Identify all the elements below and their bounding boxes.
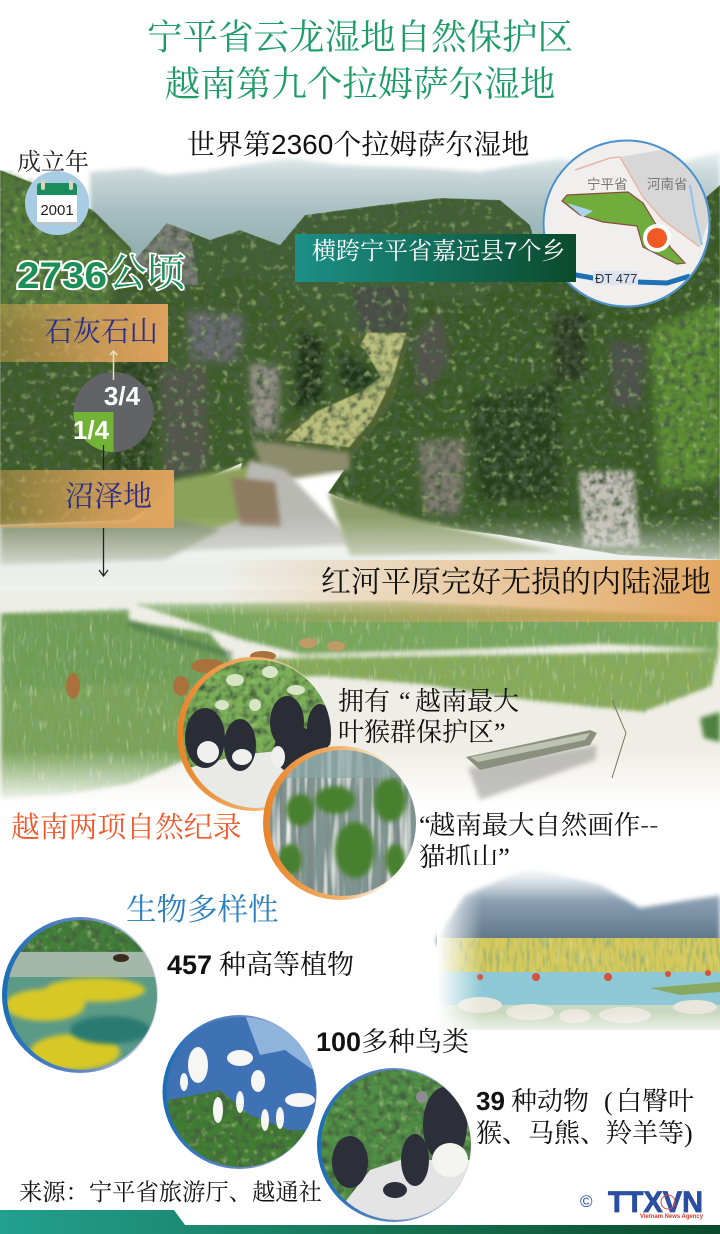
banner: spans 7 communes	[295, 231, 576, 282]
map: reserve location	[540, 140, 715, 310]
text: largest langur reserve: “	[399, 687, 411, 716]
icon: calendar 2001	[25, 171, 89, 235]
arrow: down from marshland	[99, 445, 108, 576]
pie chart: 3/4 limestone, 1/4 marsh: 3/4	[104, 381, 141, 411]
title: 越南第九个拉姆萨尔湿地	[165, 56, 555, 107]
map: reserve location: 河南省	[647, 177, 688, 192]
heading: biodiversity: 生物多样性	[126, 885, 278, 929]
cattle	[66, 651, 276, 699]
logo: TTXVN: TTXVN	[608, 1186, 703, 1219]
stat: 39 animal species: 白臀叶	[616, 1081, 694, 1118]
label: limestone mountains: 石灰石山	[44, 309, 158, 350]
photo circle: higher plants	[2, 917, 160, 1073]
logo: TTXVN: Vietnam News Agency	[640, 1214, 704, 1220]
map: reserve location: 宁平省	[587, 176, 628, 192]
distant mountains	[90, 152, 720, 300]
photo circle: langur reserve	[177, 657, 333, 811]
boat	[466, 700, 626, 800]
pie chart: 3/4 limestone, 1/4 marsh	[73, 351, 154, 452]
stat: 39 animal species: 猴、马熊、羚羊等)	[476, 1113, 693, 1150]
pie chart: 3/4 limestone, 1/4 marsh: 1/4	[73, 415, 110, 445]
water	[0, 590, 720, 805]
photo circle: cat scratch mountain	[263, 746, 417, 900]
text: largest langur reserve	[338, 681, 519, 749]
stat: 39 animal species	[476, 1081, 694, 1150]
left mountain	[0, 170, 381, 525]
banner: Red River plain wetland	[220, 557, 720, 622]
text: largest natural painting: 越南最大自然画作--	[429, 804, 658, 842]
meadow	[0, 600, 720, 800]
river	[0, 440, 560, 565]
stat: 457 plants: 457 种高等植物	[167, 943, 354, 982]
text: largest langur reserve: 越南最大	[415, 681, 519, 718]
title	[147, 9, 573, 107]
right mountain	[328, 185, 720, 560]
label: founding year: 成立年	[17, 142, 89, 177]
stat: 39 animal species: 39	[476, 1086, 505, 1116]
label: limestone mountains	[0, 304, 168, 362]
label: marshland	[0, 470, 174, 528]
text: largest natural painting	[419, 804, 658, 874]
stat: area 2736 hectares: 公顷	[108, 243, 186, 298]
icon: calendar 2001: 2001	[40, 202, 74, 219]
text: largest langur reserve: 拥有	[338, 681, 390, 718]
heading: two natural records: 越南两项自然纪录	[11, 805, 241, 846]
text: largest natural painting: “	[419, 810, 431, 840]
stat: area 2736 hectares	[17, 243, 186, 298]
text: largest langur reserve: 叶猴群保护区”	[338, 712, 506, 749]
stat: 39 animal species: 种动物	[511, 1081, 589, 1118]
stat: 100 bird species: 100多种鸟类	[316, 1020, 469, 1059]
photo: lake with boats	[437, 865, 720, 1040]
heading: world ranking: 世界第2360个拉姆萨尔湿地	[187, 123, 529, 163]
background photo: karst wetland landscape	[0, 120, 720, 820]
label: marshland: 沼泽地	[65, 474, 152, 515]
photo circle: birds	[162, 1015, 320, 1170]
text: largest natural painting: 猫抓山”	[419, 836, 510, 874]
logo: TTXVN: ©	[580, 1192, 593, 1211]
banner: spans 7 communes: 横跨宁平省嘉远县7个乡	[312, 231, 565, 266]
banner: Red River plain wetland: 红河平原完好无损的内陆湿地	[321, 557, 711, 601]
title: 宁平省云龙湿地自然保护区	[147, 9, 573, 60]
photo circle: langurs	[317, 1068, 475, 1225]
footer band	[0, 1210, 720, 1234]
stat: 39 animal species: (	[604, 1087, 613, 1116]
mountains	[0, 170, 720, 560]
stat: area 2736 hectares: 2736	[17, 255, 107, 296]
source line: 来源：宁平省旅游厅、越通社	[19, 1173, 322, 1207]
map: reserve location: ĐT 477	[595, 271, 637, 286]
